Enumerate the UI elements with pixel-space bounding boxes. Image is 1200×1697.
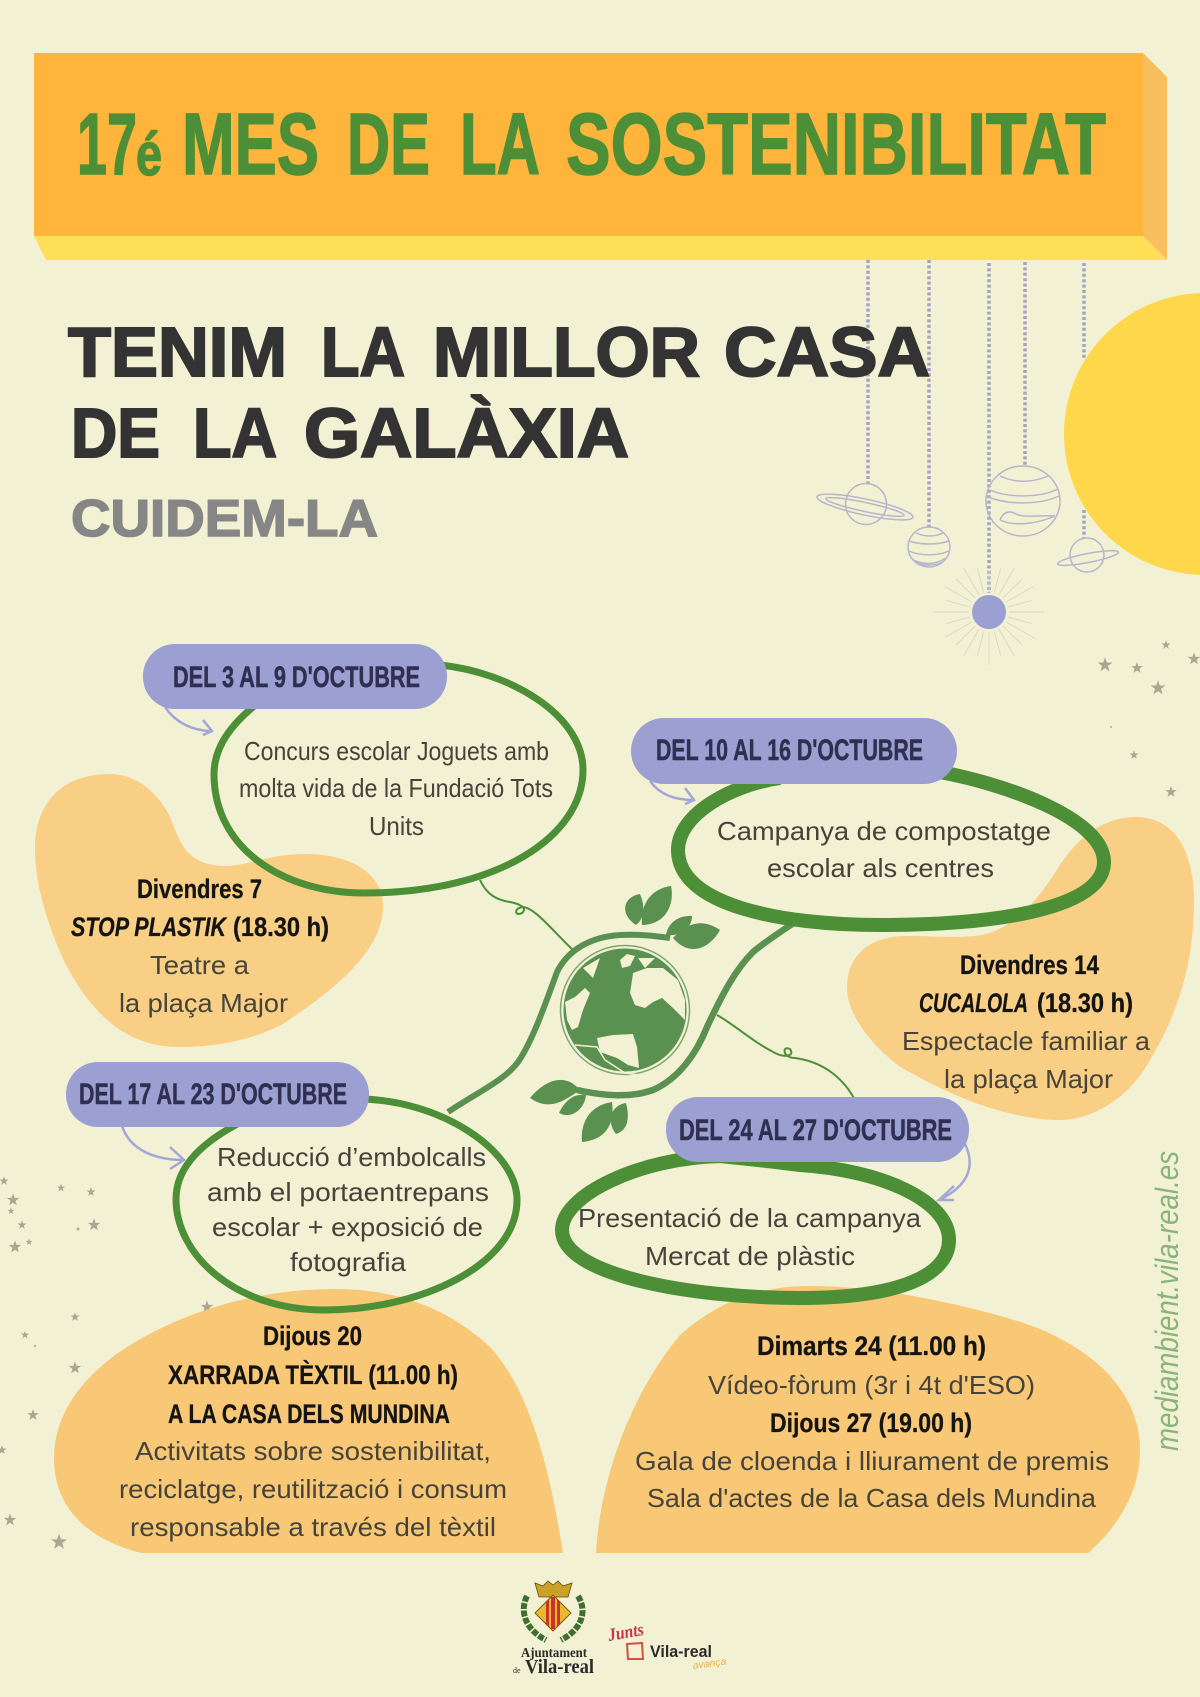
blob: Divendres 7: [35, 774, 383, 1047]
event text: Dijous 27 (19.00 h): [770, 1408, 972, 1438]
date pill: [666, 1097, 969, 1162]
logo: Junts Vila-real avança: avança: [692, 1656, 728, 1672]
activity text: molta vida de la Fundació Tots: [239, 773, 553, 803]
event text: Activitats sobre sostenibilitat,: [135, 1436, 491, 1466]
vine: upper left: [448, 935, 670, 1112]
event text: la plaça Major: [119, 988, 288, 1018]
event text: Dimarts 24 (11.00 h): [757, 1331, 986, 1361]
planet: striped small: [908, 527, 950, 567]
panel: week 24-27 October: [562, 1097, 1140, 1553]
string: star: [987, 263, 991, 593]
activity text: [239, 736, 553, 841]
blob: Dimarts 24 and Dijous 27: [596, 1286, 1140, 1553]
planet: large banded: [986, 466, 1060, 536]
central globe with vines: [448, 880, 856, 1142]
title: LA: [460, 96, 540, 193]
hanging planets: [815, 260, 1119, 665]
string: saturn: [866, 260, 870, 485]
icon: wreath: [524, 1596, 583, 1640]
activity text: Presentació de la campanya: [578, 1203, 922, 1233]
activity text: fotografia: [290, 1247, 407, 1277]
event text: (18.30 h): [233, 912, 329, 942]
activity text: Units: [369, 811, 424, 841]
event text: Espectacle familiar a: [902, 1026, 1151, 1056]
logo text: [513, 1646, 594, 1678]
icon: shield: [535, 1595, 571, 1631]
event text: Divendres 14: [960, 950, 1099, 980]
activity text: Campanya de compostatge: [717, 816, 1051, 846]
activity text: [207, 1142, 489, 1277]
heading: LA: [193, 394, 277, 472]
tendril: upper: [480, 880, 573, 950]
activity text: Mercat de plàstic: [645, 1241, 855, 1271]
subheading: CUIDEM-LA: [71, 490, 378, 548]
event text: CUCALOLA: [919, 988, 1028, 1018]
outline: activity bubble: [176, 1099, 517, 1310]
date pill: [143, 644, 447, 709]
logo: Ajuntament de Vila-real: [513, 1581, 594, 1678]
logo text: Vila-real: [525, 1656, 594, 1678]
string: striped planet: [927, 260, 931, 527]
date pill: DEL 10 AL 16 D'OCTUBRE: [656, 734, 923, 767]
logo text: de: [513, 1666, 521, 1675]
activity text: Reducció d’embolcalls: [217, 1142, 486, 1172]
event text: [71, 874, 329, 1018]
blob: Divendres 14: [847, 817, 1194, 1120]
event text: A LA CASA DELS MUNDINA: [168, 1399, 450, 1429]
date pill: DEL 3 AL 9 D'OCTUBRE: [173, 661, 420, 694]
title: [77, 96, 1106, 193]
event text: [902, 950, 1151, 1094]
event text: XARRADA TÈXTIL (11.00 h): [168, 1359, 458, 1390]
activity text: escolar als centres: [767, 853, 994, 883]
blob: Dijous 20: [54, 1289, 563, 1553]
title: MES: [182, 96, 319, 193]
event text: STOP PLASTIK: [71, 912, 228, 942]
heading: TENIM: [68, 313, 287, 391]
banner: [34, 53, 1167, 260]
arrow: [122, 1126, 184, 1169]
planet: saturn: [815, 484, 915, 525]
event text: [635, 1331, 1109, 1513]
activity text: escolar + exposició de: [212, 1212, 483, 1242]
title: DE: [347, 96, 430, 193]
date pill: [66, 1062, 369, 1127]
sun: [1064, 293, 1200, 575]
event text: Sala d'actes de la Casa dels Mundina: [647, 1483, 1097, 1513]
icon: square mark: [627, 1643, 643, 1659]
activity text: [717, 816, 1051, 883]
activity text: Concurs escolar Joguets amb: [244, 736, 549, 766]
vine: lower right: [577, 916, 805, 1095]
heading: CASA: [724, 313, 930, 391]
logo: Junts Vila-real avança: Junts: [605, 1619, 645, 1645]
outline: activity bubble: [562, 1156, 949, 1298]
heading: LA: [321, 313, 405, 391]
string: small saturn upper: [1082, 263, 1086, 360]
tendril: lower: [717, 1015, 856, 1102]
logo: Junts Vila-real avança: Vila-real: [650, 1642, 712, 1661]
arrow: [939, 1144, 970, 1200]
event text: reciclatge, reutilització i consum: [119, 1474, 507, 1504]
event text: Vídeo-fòrum (3r i 4t d'ESO): [708, 1370, 1035, 1400]
event text: [119, 1321, 507, 1542]
website url: mediambient.vila-real.es: [1149, 1151, 1185, 1451]
heading: DE: [71, 394, 160, 472]
event text: Dijous 20: [263, 1321, 362, 1351]
title: é: [136, 121, 162, 188]
date pill: DEL 17 AL 23 D'OCTUBRE: [79, 1078, 347, 1111]
event text: la plaça Major: [944, 1064, 1113, 1094]
logo: Junts Vila-real avança: [605, 1619, 728, 1672]
logo text: Ajuntament: [521, 1646, 587, 1661]
leaves: upper: [625, 886, 720, 949]
arrow: [650, 781, 694, 804]
activity text: amb el portaentrepans: [207, 1177, 489, 1207]
stars: right field: [1098, 640, 1200, 797]
panel: week 3-9 October: [35, 644, 583, 1047]
event text: Teatre a: [150, 950, 250, 980]
outline: activity bubble: [214, 665, 583, 893]
arrow: [165, 707, 212, 735]
heading: GALÀXIA: [304, 394, 629, 472]
globe: [560, 946, 690, 1075]
heading: [68, 313, 930, 472]
date pill: DEL 24 AL 27 D'OCTUBRE: [679, 1114, 952, 1147]
activity text: [578, 1203, 922, 1271]
event text: Divendres 7: [137, 874, 262, 904]
panel: week 17-23 October: [54, 1062, 563, 1553]
planet: small saturn: [1057, 538, 1119, 572]
string: large planet: [1023, 262, 1027, 466]
panel: week 10-16 October: [631, 718, 1194, 1120]
heading: MILLOR: [433, 313, 700, 391]
event text: (18.30 h): [1037, 988, 1133, 1018]
date pill: [631, 718, 957, 784]
event text: Gala de cloenda i lliurament de premis: [635, 1446, 1109, 1476]
icon: crown: [535, 1581, 572, 1597]
string: small saturn lower: [1082, 510, 1086, 538]
event text: responsable a través del tèxtil: [130, 1512, 496, 1542]
leaves: lower: [530, 1080, 628, 1142]
hanging star: [934, 568, 1044, 665]
title: 17: [77, 96, 137, 193]
stars: left field: [0, 1176, 213, 1549]
outline: activity bubble: [678, 772, 1104, 925]
